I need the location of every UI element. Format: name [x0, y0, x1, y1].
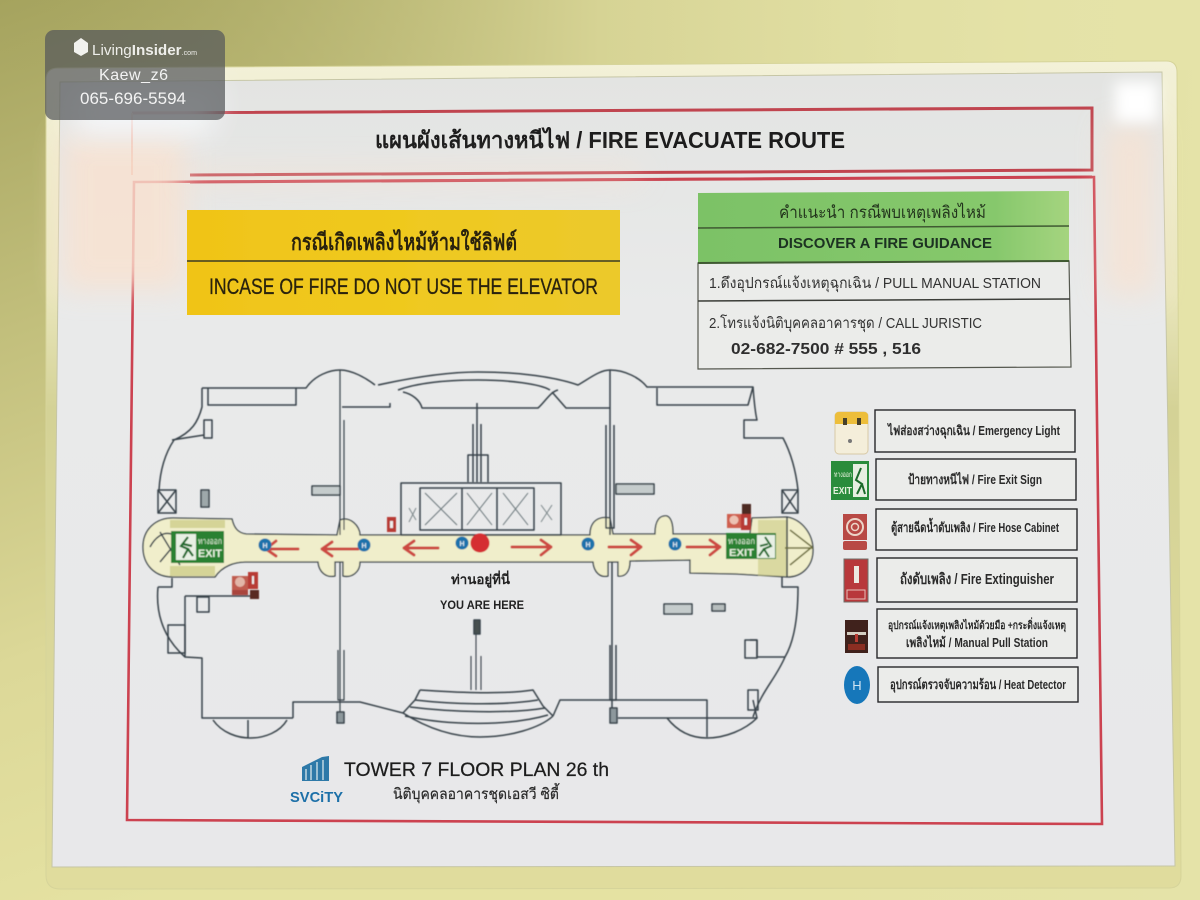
legend: emergency light: ไฟส่องสว่างฉุกเฉิน / Emergency Light — [886, 422, 1061, 439]
right exit sign — [726, 533, 776, 559]
guidance heading english: DISCOVER A FIRE GUIDANCE — [778, 235, 992, 252]
legend — [831, 410, 1078, 704]
heat detectors: H — [459, 541, 465, 548]
heading: fire evacuate route: แผนผังเส้นทางหนีไฟ / FIRE EVACUATE ROUTE — [375, 126, 845, 153]
step 1: 1.ดึงอุปกรณ์แจ้งเหตุฉุกเฉิน / PULL MANUAL STATION — [709, 275, 1041, 293]
heat detectors: H — [585, 542, 591, 549]
right walls — [606, 370, 614, 535]
floor plan — [143, 370, 813, 738]
legend: fire exit sign — [831, 459, 1076, 500]
lower left walls — [158, 578, 403, 718]
heat detectors: H — [262, 543, 268, 550]
legend: fire hose cabinet — [843, 509, 1077, 550]
guidance heading thai: คำแนะนำ กรณีพบเหตุเพลิงไหม้ — [779, 202, 986, 223]
legend: heat detector: H — [852, 678, 862, 693]
legend: manual pull station — [845, 609, 1077, 658]
watermark logo icon — [74, 38, 88, 56]
right exit sign: ทางออก — [728, 536, 755, 546]
heat detectors — [258, 536, 682, 552]
heat detectors: H — [361, 543, 367, 550]
title panel — [132, 108, 1092, 182]
left exit sign: ทางออก — [198, 536, 222, 546]
legend: manual pull station: อุปกรณ์แจ้งเหตุเพลิงไหม้ด้วยมือ +กระดิ่งแจ้งเหตุ — [888, 617, 1066, 633]
legend: fire exit sign: EXIT — [833, 486, 852, 497]
panel: fire guidance — [698, 191, 1071, 369]
watermark phone: 065-696-5594 — [80, 89, 186, 108]
you are here marker — [470, 534, 490, 552]
watermark — [45, 30, 225, 120]
corridor and exit highlight — [143, 516, 813, 577]
centre core — [401, 483, 561, 535]
you are here label — [440, 570, 524, 612]
legend: fire extinguisher — [844, 558, 1077, 602]
heat detectors: H — [672, 542, 678, 549]
warning text english: INCASE OF FIRE DO NOT USE THE ELEVATOR — [209, 274, 598, 299]
phone number: 02-682-7500 # 555 , 516 — [731, 341, 921, 358]
walls — [150, 370, 813, 738]
footer: logo and floor plan label — [290, 756, 609, 806]
floor plan title: TOWER 7 FLOOR PLAN 26 th — [344, 760, 609, 781]
main red frame — [127, 177, 1102, 824]
left exit sign: EXIT — [198, 548, 222, 560]
step 2: 2.โทรแจ้งนิติบุคคลอาคารชุด / CALL JURISTIC — [709, 314, 982, 333]
watermark name: Kaew_z6 — [99, 67, 168, 84]
legend: heat detector — [844, 666, 1078, 704]
lower right walls — [750, 577, 798, 717]
top and bottom bleachers — [478, 370, 753, 405]
arrows: route left — [266, 541, 438, 556]
arrows: route right — [512, 540, 720, 555]
legend: fire exit sign: ทางออก — [834, 470, 852, 479]
legend: emergency light — [835, 410, 1075, 454]
you are here label: ท่านอยู่ที่นี่ — [451, 570, 510, 588]
glare on acrylic — [62, 82, 1158, 295]
legend: fire hose cabinet: ตู้สายฉีดน้ำดับเพลิง / Fire Hose Cabinet — [891, 517, 1059, 536]
building name thai: นิติบุคคลอาคารชุดเอสวี ซิตี้ — [393, 783, 560, 804]
warning text thai: กรณีเกิดเพลิงไหม้ห้ามใช้ลิฟต์ — [291, 228, 517, 255]
watermark brand: LivingInsider.com — [92, 42, 197, 59]
logo: SVCiTY — [290, 789, 343, 806]
panel: elevator warning — [187, 210, 620, 315]
you are here label: YOU ARE HERE — [440, 598, 524, 612]
legend: manual pull station: เพลิงไหม้ / Manual Pull Station — [906, 634, 1048, 650]
logo — [290, 756, 343, 806]
legend: fire exit sign: ป้ายทางหนีไฟ / Fire Exit Sign — [908, 471, 1042, 487]
legend: fire extinguisher: ถังดับเพลิง / Fire Extinguisher — [900, 570, 1054, 588]
legend: heat detector: อุปกรณ์ตรวจจับความร้อน / Heat Detector — [890, 677, 1066, 693]
left exit sign — [171, 531, 224, 563]
equipment icons: right — [727, 504, 751, 530]
equipment icons: left — [232, 517, 396, 599]
right exit sign: EXIT — [729, 548, 754, 559]
outer left walls — [202, 388, 296, 405]
